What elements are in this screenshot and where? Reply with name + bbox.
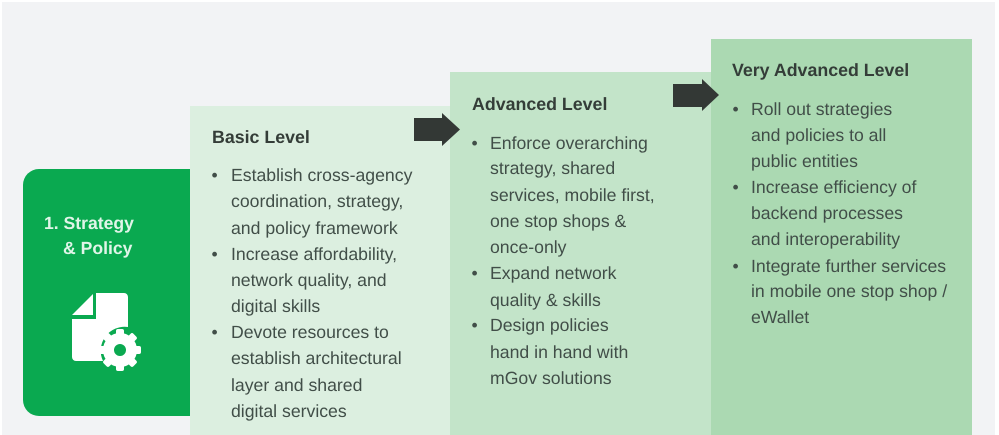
list: basic level: coordination, strategy, (231, 191, 403, 211)
list: very advanced level: in mobile one stop shop / (751, 281, 947, 301)
icon: document with gear (72, 293, 141, 371)
list: basic level: layer and shared (231, 375, 362, 395)
panel: very advanced level (711, 39, 972, 435)
list: advanced level: Design policies (490, 315, 609, 335)
list: advanced level: Expand network (490, 263, 616, 283)
list: advanced level (472, 133, 655, 388)
list: basic level: establish architectural (231, 348, 402, 368)
list: basic level: network quality, and (231, 270, 387, 290)
heading: very advanced level: Very Advanced Level (732, 60, 909, 80)
list: advanced level: mGov solutions (490, 368, 612, 388)
list: advanced level: services, mobile first, (490, 185, 655, 205)
list: basic level: and policy framework (231, 218, 398, 238)
panel: advanced level (450, 72, 711, 435)
list: basic level (212, 165, 412, 421)
arrow: advanced to very advanced (673, 79, 719, 111)
list: advanced level: • (472, 315, 478, 335)
list: advanced level: Enforce overarching (490, 133, 648, 153)
list: basic level: digital skills (231, 296, 320, 316)
list: basic level: digital services (231, 401, 347, 421)
list: very advanced level: Integrate further services (751, 256, 946, 276)
list: very advanced level: eWallet (751, 307, 809, 327)
list: very advanced level: • (732, 177, 739, 197)
list: advanced level: • (472, 263, 478, 283)
list: very advanced level: Roll out strategies (751, 99, 892, 119)
list: basic level: • (212, 165, 218, 185)
list: very advanced level: public entities (751, 151, 858, 171)
list: very advanced level: Increase efficiency of (751, 177, 916, 197)
list: advanced level: • (472, 133, 478, 153)
heading: basic level: Basic Level (212, 127, 310, 147)
list: very advanced level: and interoperability (751, 229, 900, 249)
list: advanced level: once-only (490, 237, 566, 257)
panel: basic level (190, 106, 450, 435)
list: advanced level: quality & skills (490, 290, 601, 310)
list: basic level: • (212, 322, 218, 342)
list: advanced level: hand in hand with (490, 342, 628, 362)
list: basic level: Devote resources to (231, 322, 389, 342)
heading: strategy and policy: 1. Strategy (44, 213, 134, 233)
arrow: basic to advanced (414, 113, 460, 146)
panel: strategy and policy (23, 169, 203, 416)
list: very advanced level: • (732, 256, 739, 276)
heading: strategy and policy: & Policy (63, 238, 132, 258)
list: basic level: Establish cross-agency (231, 165, 412, 185)
heading: advanced level: Advanced Level (472, 94, 607, 114)
list: basic level: • (212, 244, 218, 264)
list: basic level: Increase affordability, (231, 244, 397, 264)
list: very advanced level: • (732, 99, 739, 119)
list: very advanced level: backend processes (751, 203, 903, 223)
list: very advanced level (732, 99, 948, 327)
list: very advanced level: and policies to all (751, 125, 886, 145)
list: advanced level: one stop shops & (490, 211, 626, 231)
heading: strategy and policy (44, 213, 134, 258)
list: advanced level: strategy, shared (490, 158, 615, 178)
